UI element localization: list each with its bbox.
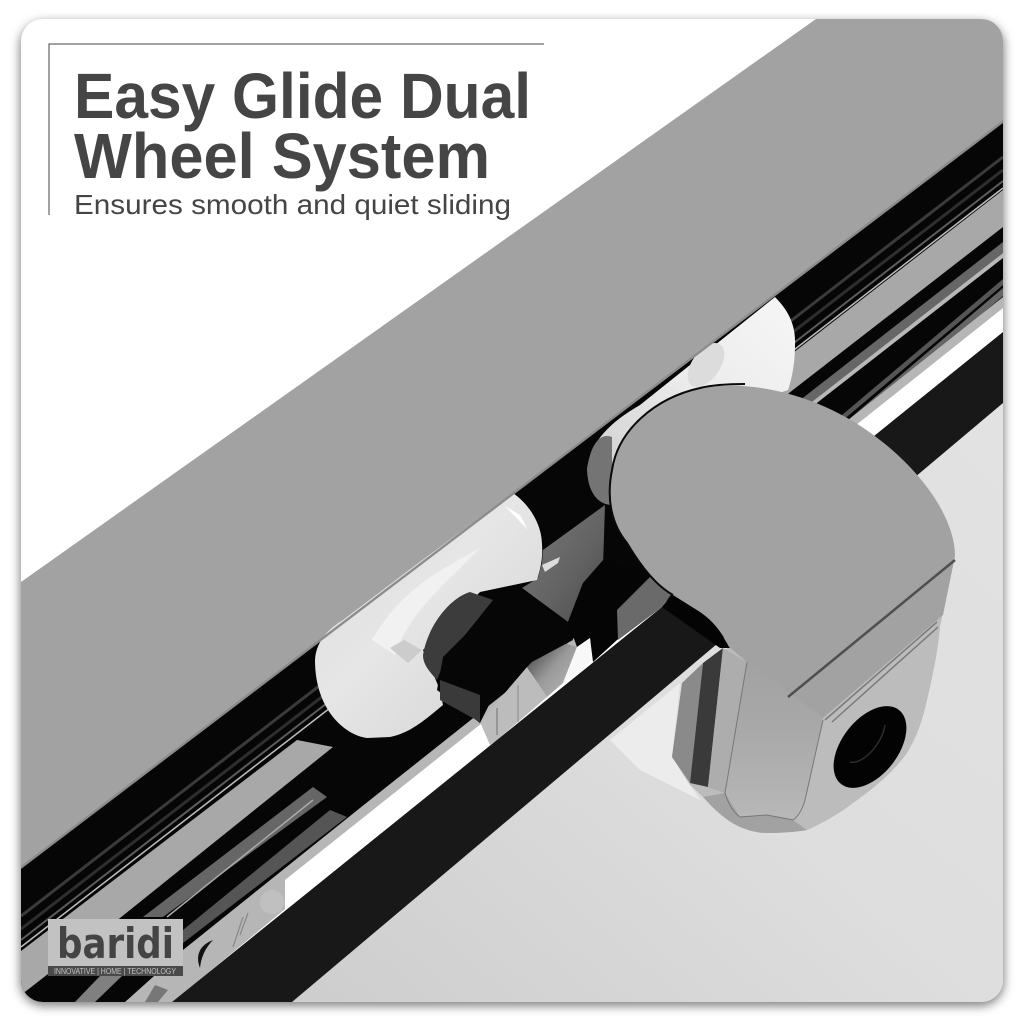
subtitle: Ensures smooth and quiet sliding [74, 189, 511, 220]
chrome bracket behind wheels [480, 505, 673, 745]
logo: baridi: INNOVATIVE | HOME | TECHNOLOGY [54, 967, 177, 976]
handle: grey cap [610, 386, 955, 718]
title block [49, 44, 544, 220]
light rail stripe and lower wedge [125, 297, 1003, 1002]
lower left wheel reflection [145, 890, 284, 1002]
top rail edge highlight [21, 120, 1003, 869]
handle: body [672, 612, 943, 833]
logo: baridi: baridi [57, 919, 174, 968]
black horizontal bar [172, 332, 1003, 1002]
wheel: right roller [587, 297, 795, 505]
title: Easy Glide Dual [74, 60, 531, 132]
glass reflection behind handle [610, 683, 700, 800]
wheel: left roller [315, 493, 542, 738]
floor: lower glass panel [280, 395, 1003, 1002]
handle: cap groove line [788, 560, 955, 697]
title [74, 60, 531, 192]
title bracket [49, 44, 544, 215]
title: Wheel System [74, 120, 490, 192]
handle: cap dark outline [610, 384, 745, 595]
wheel axle and hub [423, 588, 573, 723]
handle: black wedge under cap [662, 593, 730, 648]
white gap between rail and bar [285, 308, 1003, 909]
handle: screw hole [834, 706, 906, 788]
top rail: flat grey cover [21, 19, 1003, 867]
